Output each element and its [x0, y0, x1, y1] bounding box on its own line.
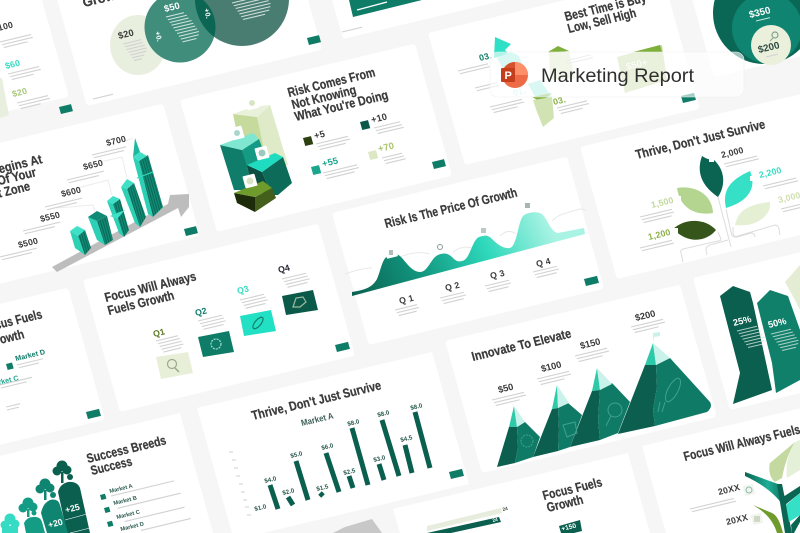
circle $50: $50	[163, 1, 181, 14]
panel: risk wave	[332, 157, 604, 345]
circle large: +0.	[202, 7, 213, 19]
aqua up arrow	[494, 37, 525, 74]
leaf values: 2,200	[758, 165, 783, 180]
panel: venn circles	[50, 0, 322, 106]
$50+ card	[617, 45, 667, 93]
footer note	[93, 94, 113, 99]
legend +5: +5	[313, 129, 326, 141]
market list: Market D	[120, 522, 145, 533]
teal ribbon 50%	[757, 290, 800, 393]
panel: focus will always plant	[642, 390, 800, 533]
panel: thrive leaves	[580, 91, 800, 279]
panel: skyscraper growth	[0, 104, 200, 292]
value labels: $150	[579, 336, 602, 351]
mountain 1	[497, 406, 540, 467]
panel: market A bar chart	[197, 352, 469, 533]
title	[541, 474, 604, 515]
quarter labels: Q 4	[535, 256, 552, 269]
step labels	[458, 50, 593, 114]
bar labels: $4.5	[400, 434, 414, 444]
market list: Market A	[109, 484, 134, 495]
connector lines	[57, 138, 133, 212]
flag	[653, 332, 660, 343]
Q2: Q2	[194, 306, 208, 318]
title: Thrive, Don't Just Survive	[634, 116, 767, 162]
panel: pricing list top left	[0, 0, 73, 153]
dark ribbon 25%	[720, 286, 772, 404]
quarter labels	[395, 256, 560, 316]
title: Focus Fuels	[541, 474, 604, 503]
mountain 2	[533, 385, 582, 457]
Q4: Q4	[277, 263, 291, 275]
growth columns: +20	[47, 517, 64, 530]
y axis ticks	[229, 452, 251, 515]
bars	[270, 412, 430, 509]
buildings	[70, 138, 163, 255]
title: Success	[89, 454, 134, 478]
title: Thrive, Don't Just Survive	[250, 377, 383, 423]
Q1: Q1	[152, 327, 166, 339]
wave chart	[352, 212, 585, 296]
panel: success breeds	[0, 413, 213, 533]
market list: Market B	[113, 496, 138, 507]
Q4	[277, 263, 318, 315]
bar labels	[254, 402, 424, 513]
title: Not Knowing	[290, 82, 358, 112]
stem lines	[681, 197, 780, 262]
title: Risk Is The Price Of Growth	[383, 185, 519, 231]
step labels: 03.	[552, 94, 567, 107]
title: Innovate To Elevate	[470, 326, 573, 364]
market C	[0, 373, 39, 410]
circle $20: $20	[117, 28, 135, 41]
market D: Market D	[14, 347, 46, 363]
+150 badge: +150	[561, 523, 577, 533]
outer circle	[713, 0, 800, 64]
leaf tags	[673, 157, 775, 233]
page badge	[335, 342, 350, 352]
title	[286, 65, 390, 124]
leaf values	[640, 145, 800, 251]
value labels: $700	[105, 134, 127, 148]
bar labels: $6.0	[321, 442, 335, 452]
mountain 4	[618, 343, 711, 434]
value labels: $500	[17, 236, 39, 250]
bar labels: $8.0	[410, 402, 424, 412]
bar labels: $5.0	[290, 450, 304, 460]
Q3: Q3	[236, 284, 250, 296]
page badge	[86, 409, 101, 419]
chart icons	[384, 198, 534, 259]
title: Risk Comes From	[286, 65, 377, 100]
panel: innovate to elevate	[445, 285, 717, 473]
page badge	[184, 226, 198, 236]
slider	[357, 2, 387, 10]
legend +70	[368, 140, 406, 164]
footer note	[342, 27, 362, 32]
panel: best time arrows	[428, 0, 700, 165]
title: Success Breeds	[85, 432, 168, 466]
price $20: $20	[11, 86, 28, 99]
legend +10: +10	[370, 111, 388, 125]
year labels: 20XX	[725, 512, 749, 527]
legend +5	[303, 129, 351, 150]
title	[103, 269, 198, 318]
bar labels: $4.0	[264, 475, 278, 485]
value labels: $600	[60, 185, 82, 199]
icon squares	[743, 484, 763, 525]
horizontal bars: 24	[502, 506, 509, 512]
title	[85, 432, 168, 478]
value labels: $50	[497, 382, 515, 395]
description text	[0, 34, 51, 109]
bar labels: $8.0	[377, 409, 391, 419]
Q2	[194, 306, 234, 357]
grey shape at bottom edge	[333, 519, 382, 533]
title: Focus Will Always	[103, 269, 198, 305]
green down arrow	[528, 46, 575, 127]
legend +55	[311, 155, 360, 179]
quarter labels: Q 3	[489, 268, 506, 281]
subtitle: Market A	[300, 410, 335, 428]
$50+ card: $50+	[625, 57, 649, 73]
Q3	[236, 284, 276, 336]
legend +10	[360, 111, 404, 134]
year labels	[690, 482, 749, 527]
Q1	[152, 327, 193, 379]
panel: focus fuels markets	[0, 288, 105, 476]
panel: nested circles	[677, 0, 800, 77]
panel: risk comes from	[180, 44, 452, 232]
pale chart block	[0, 78, 9, 118]
panel: focus fuels growth bottom	[393, 453, 650, 533]
grey arrow	[52, 194, 189, 272]
icon cards	[229, 96, 270, 188]
middle circle $350: $350	[748, 5, 772, 21]
horizontal bars	[427, 506, 509, 533]
isometric blocks	[220, 105, 292, 212]
mountain icons	[521, 376, 684, 447]
title	[0, 151, 44, 210]
leaf values: 1,200	[647, 227, 672, 242]
overlay: product label	[490, 52, 744, 97]
inner circle $200: $200	[757, 40, 781, 56]
value labels: $650	[82, 158, 104, 172]
icon: PowerPoint: P	[504, 70, 512, 82]
panel: slider card	[306, 0, 578, 39]
legend +55: +55	[321, 155, 339, 169]
page badge	[449, 469, 464, 479]
value labels	[0, 134, 127, 260]
horizontal bars: 24	[492, 517, 499, 523]
market list	[100, 479, 191, 533]
page badge	[584, 276, 599, 286]
quarter labels: Q 1	[398, 293, 415, 306]
circle $20	[110, 15, 166, 75]
bar labels: $2.0	[282, 487, 296, 497]
teal block	[349, 0, 422, 17]
growth columns	[24, 482, 90, 533]
title: What You're Doing	[293, 87, 390, 124]
bar labels: $2.5	[343, 467, 357, 477]
page badge	[307, 35, 321, 45]
mountain 3	[570, 368, 630, 447]
bar labels: $8.0	[347, 418, 361, 428]
step labels: 01.	[512, 85, 527, 98]
market list: Market C	[116, 510, 141, 521]
legend +70: +70	[377, 140, 395, 154]
icon: PowerPoint	[501, 62, 528, 88]
+150 badge	[559, 520, 582, 533]
plant	[745, 440, 800, 533]
leaves	[673, 156, 770, 240]
panel: focus quarters	[83, 224, 355, 412]
outlined humps	[345, 209, 587, 274]
page badge	[432, 159, 446, 169]
title	[0, 306, 44, 350]
price $60: $60	[4, 58, 21, 71]
title: Growth	[545, 492, 585, 515]
title: Fuels Growth	[106, 288, 176, 318]
value labels: $550	[39, 210, 61, 224]
circle $50	[144, 0, 216, 62]
step labels: 03.	[478, 50, 493, 63]
circle large	[156, 0, 289, 46]
inner circle $200	[751, 25, 791, 65]
leaf values: 2,000	[720, 145, 745, 160]
bar labels: $1.5	[316, 483, 330, 493]
leaf values: 1,500	[650, 195, 675, 210]
year labels: 20XX	[717, 482, 741, 497]
middle circle $350	[732, 0, 800, 63]
pale ribbon	[785, 265, 800, 310]
market D	[6, 347, 46, 370]
title: Low, Sell High	[566, 5, 638, 36]
bar labels: $1.0	[254, 503, 268, 513]
circle large: +0.	[153, 30, 164, 42]
page badge	[681, 93, 696, 103]
value labels: $100	[540, 359, 563, 374]
panel: percent ribbons	[693, 222, 800, 410]
page badge	[59, 104, 73, 114]
teal ribbon 50%: 50%	[767, 316, 788, 330]
growth columns: +25	[64, 502, 81, 515]
quarter labels: Q 2	[444, 280, 461, 293]
product name: Marketing Report	[541, 66, 695, 87]
trees	[0, 460, 73, 533]
value labels: $200	[634, 308, 657, 323]
value labels	[492, 308, 666, 406]
dark ribbon 25%: 25%	[732, 314, 753, 328]
bar labels: $3.0	[373, 454, 387, 464]
